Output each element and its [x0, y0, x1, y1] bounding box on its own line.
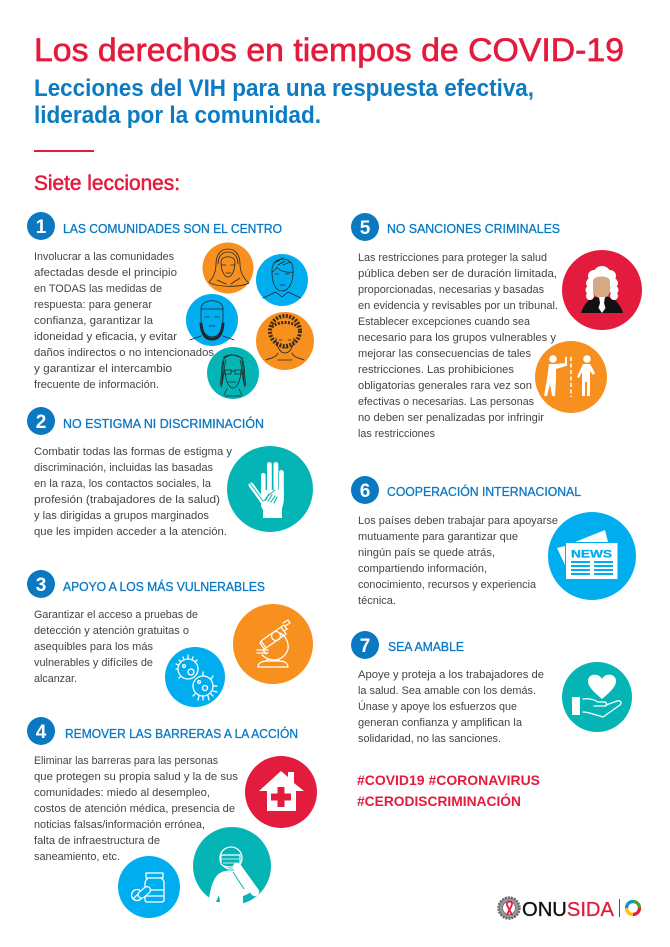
text block 7: Apoye y proteja a los trabajadores de [358, 669, 544, 681]
text block 2: que les impiden acceder a la atención. [34, 526, 227, 538]
icon: young man [256, 254, 308, 306]
text block 5: obligatorias generales rara vez son [358, 380, 532, 392]
text block 5: proporcionadas, necesarias y basadas [358, 284, 544, 296]
text block 5: necesario para los grupos vulnerables y [358, 332, 556, 344]
number badge 6 [351, 476, 379, 504]
number badge 4: 4 [36, 722, 47, 743]
panel: lesson 3 [27, 570, 313, 707]
text block 1: frecuente de información. [34, 379, 159, 391]
text block 4 [34, 755, 238, 863]
hashtags: #COVID19 #CORONAVIRUS [357, 772, 540, 788]
text block 1: en TODAS las medidas de [34, 283, 162, 295]
hashtags: #CERODISCRIMINACIÓN [357, 792, 521, 809]
text block 7 [358, 669, 544, 745]
icon: bearded man with cap [186, 294, 238, 346]
text block 5: pública deben ser de duración limitada, [358, 268, 557, 280]
text block 4: falta de infraestructura de [34, 835, 160, 847]
text block 2 [34, 446, 232, 538]
title: Los derechos en tiempos de COVID-19 [34, 32, 624, 68]
text block 2: Combatir todas las formas de estigma y [34, 446, 232, 458]
text block 6: mutuamente para garantizar que [358, 531, 518, 543]
number badge 3 [27, 570, 55, 598]
number badge 5 [351, 213, 379, 241]
heading 7: SEA AMABLE [388, 639, 464, 654]
icon: pills and bottle [118, 856, 180, 918]
number badge 2 [27, 407, 55, 435]
section heading: Siete lecciones: [34, 172, 180, 195]
icon: masked person touching face [193, 827, 271, 913]
panel: lesson 4 [27, 717, 317, 918]
text block 1 [34, 251, 214, 391]
text block 2: discriminación, incluidas las basadas [34, 462, 213, 474]
icon: judge with wig [562, 250, 642, 330]
text block 7: solidaridad, no las sanciones. [358, 733, 501, 745]
text block 5: en evidencia y revisables por un tribunal. [358, 300, 558, 312]
text block 5 [358, 252, 558, 440]
text block 4: costos de atención médica, presencia de [34, 803, 235, 815]
text block 5: no deben ser penalizadas por infringir [358, 412, 544, 424]
hashtags [357, 772, 540, 809]
text block 3: vulnerables y difíciles de [34, 657, 153, 669]
text block 5: Establecer excepciones cuando sea [358, 316, 531, 328]
text block 4: que protegen su propia salud y la de sus [34, 771, 238, 783]
number badge 6: 6 [360, 481, 370, 502]
logo wordmark: ONUSIDA [522, 899, 615, 921]
text block 6 [358, 515, 558, 607]
text block 5: restricciones. Las prohibiciones [358, 364, 514, 376]
heading 6: COOPERACIÓN INTERNACIONAL [387, 484, 581, 499]
text block 6: conocimiento, recursos y experiencia [358, 579, 537, 591]
text block 7: Únase y apoye los esfuerzos que [358, 700, 517, 713]
text block 6: ningún país se quede atrás, [358, 547, 495, 559]
panel: lesson 1 [27, 212, 314, 399]
number badge 1 [27, 212, 55, 240]
panel: lesson 7 [351, 631, 632, 745]
icon: newspaper [548, 512, 636, 600]
number badge 3: 3 [36, 575, 46, 596]
text block 5: efectivas o necesarias. Las personas [358, 396, 534, 408]
text block 6: Los países deben trabajar para apoyarse [358, 515, 558, 527]
icon: SDG wheel [626, 902, 640, 914]
heading 3: APOYO A LOS MÁS VULNERABLES [63, 579, 265, 594]
heading 4: REMOVER LAS BARRERAS A LA ACCIÓN [65, 726, 298, 741]
icon: newspaper: NEWS [571, 548, 612, 560]
heading 2: NO ESTIGMA NI DISCRIMINACIÓN [63, 416, 264, 431]
text block 3: detección y atención gratuitas o [34, 625, 189, 637]
heading 5: NO SANCIONES CRIMINALES [387, 221, 560, 236]
number badge 5: 5 [360, 218, 371, 239]
text block 3: alcanzar. [34, 673, 77, 685]
text block 5: mejorar las consecuencias de tales [358, 348, 531, 360]
text block 2: profesión (trabajadores de la salud) [34, 494, 220, 506]
text block 6: técnica. [358, 595, 396, 607]
text block 3: Garantizar el acceso a pruebas de [34, 609, 198, 621]
text block 6: compartiendo información, [358, 563, 487, 575]
text block 1: confianza, garantizar la [34, 315, 154, 327]
icon: microscope [233, 604, 313, 684]
icon: raised hand [227, 446, 313, 532]
number badge 1: 1 [36, 217, 47, 238]
text block 4: noticias falsas/información errónea, [34, 819, 205, 831]
subtitle: liderada por la comunidad. [34, 102, 321, 129]
number badge 2: 2 [36, 412, 46, 433]
icon: heart over open hand [562, 662, 632, 732]
text block 2: en la raza, los contactos sociales, la [34, 478, 212, 490]
text block 1: y garantizar el intercambio [34, 363, 172, 375]
text block 7: la salud. Sea amable con los demás. [358, 685, 536, 697]
text block 5: las restricciones [358, 428, 435, 440]
text block 1: afectadas desde el principio [34, 267, 177, 279]
divider [619, 899, 620, 917]
panel: lesson 2 [27, 407, 313, 538]
text block 4: saneamiento, etc. [34, 851, 120, 863]
icon: physical distancing figures [535, 341, 607, 413]
icon: virus particles [165, 647, 225, 707]
subtitle [34, 75, 534, 129]
accent rule [34, 150, 94, 152]
icon: woman with glasses [207, 347, 259, 399]
panel: lesson 6 [351, 476, 636, 607]
text block 4: Eliminar las barreras para las personas [34, 755, 218, 767]
header [34, 32, 624, 195]
text block 4: comunidades: miedo al desempleo, [34, 787, 210, 799]
icon: woman with headscarf [202, 242, 254, 294]
logo: ONUSIDA [498, 898, 640, 921]
number badge 7: 7 [360, 636, 370, 657]
panel: lesson 5 [351, 213, 642, 440]
subtitle: Lecciones del VIH para una respuesta efectiva, [34, 75, 534, 102]
text block 3: asequibles para los más [34, 641, 153, 653]
text block 1: respuesta: para generar [34, 299, 152, 311]
text block 1: daños indirectos o no intencionados [34, 347, 214, 359]
number badge 4 [27, 717, 55, 745]
text block 1: Involucrar a las comunidades [34, 251, 174, 263]
text block 5: Las restricciones para proteger la salud [358, 252, 547, 264]
icon: woman with curly hair [256, 312, 314, 370]
text block 3 [34, 609, 198, 685]
heading 1: LAS COMUNIDADES SON EL CENTRO [63, 221, 282, 236]
text block 2: y las dirigidas a grupos marginados [34, 510, 209, 522]
number badge 7 [351, 631, 379, 659]
icon: house with cross [245, 756, 317, 828]
text block 7: generan confianza y amplifican la [358, 717, 523, 729]
icon: UN emblem with ribbon [498, 898, 520, 918]
text block 1: idoneidad y eficacia, y evitar [34, 331, 177, 343]
